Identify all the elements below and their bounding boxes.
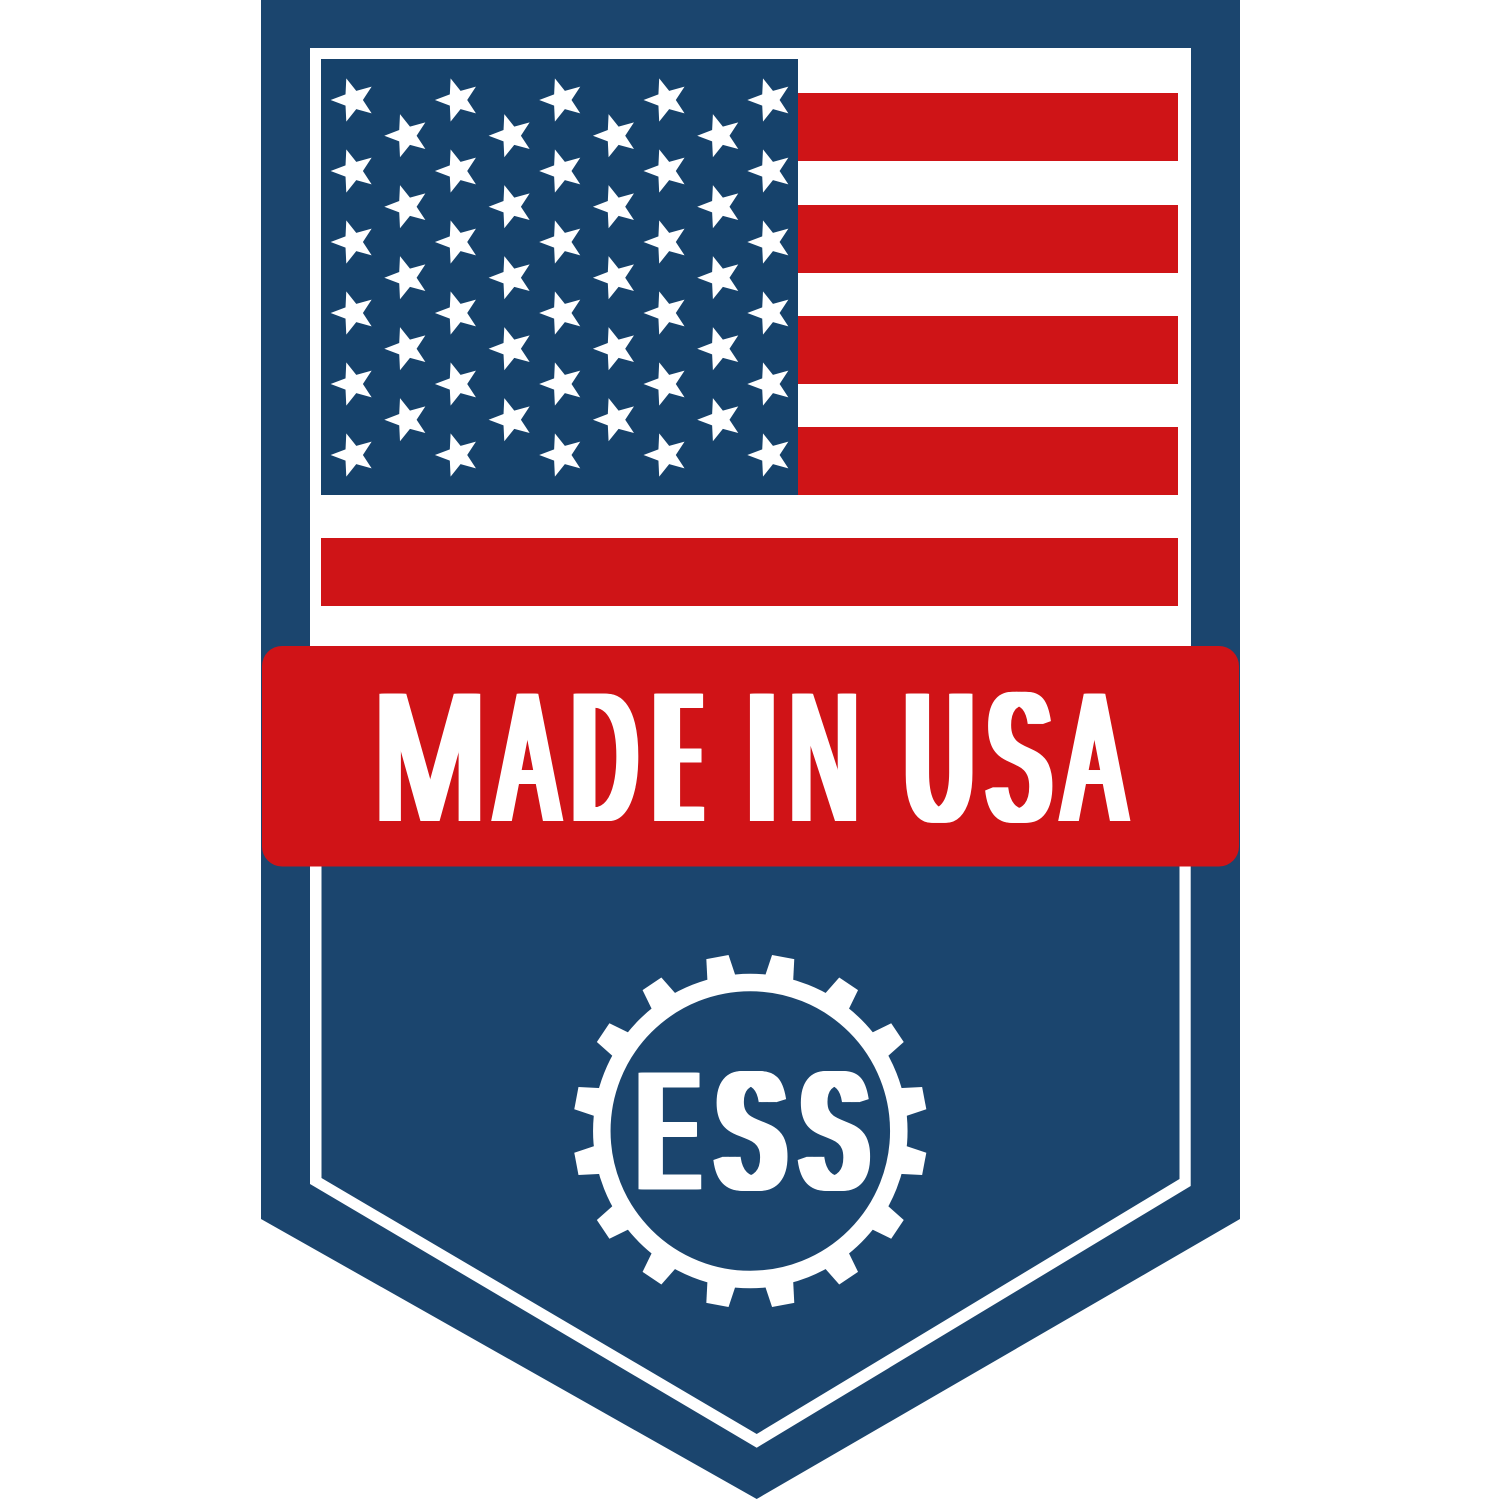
banner text: MADE IN USA: S	[981, 655, 1042, 861]
logo text: ESS: S	[710, 1038, 774, 1224]
logo text: ESS: S	[794, 1038, 857, 1224]
flag white field	[310, 48, 1191, 648]
banner text: MADE IN USA: U	[899, 655, 965, 861]
red banner	[262, 646, 1239, 866]
banner text: MADE IN USA: E	[650, 655, 686, 861]
gear ring	[602, 982, 899, 1280]
flag stars	[331, 78, 788, 477]
badge illustration: A	[1058, 655, 1119, 861]
american flag	[310, 48, 1191, 648]
flag red stripes	[321, 93, 1178, 606]
banner text: MADE IN USA: A	[491, 655, 552, 861]
banner text: MADE IN USA: I	[739, 655, 772, 861]
lower chevron outline	[310, 860, 1191, 1448]
banner text: MADE IN USA: M	[368, 655, 481, 861]
gear teeth	[574, 954, 927, 1308]
flag canton	[321, 59, 798, 495]
logo text: ESS: E	[632, 1038, 689, 1224]
shield background	[261, 0, 1240, 1499]
icon: gear logo	[574, 954, 927, 1308]
banner text: MADE IN USA: N	[784, 655, 854, 861]
banner text: MADE IN USA: D	[566, 655, 628, 861]
